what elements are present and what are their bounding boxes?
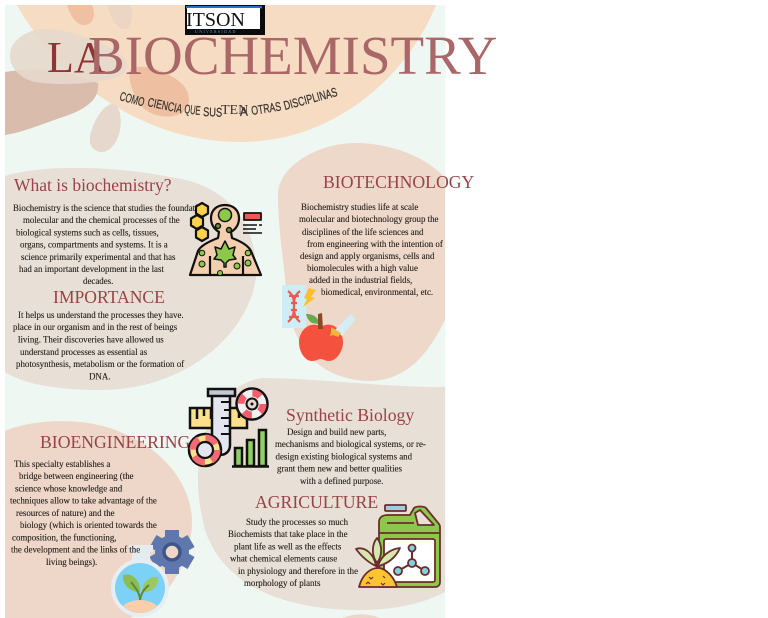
text: agriculture: plant life as well as the effects — [234, 542, 342, 552]
text: biotechnology: biomolecules with a high value — [307, 263, 418, 273]
text: importance — [13, 310, 184, 382]
text: agriculture: what chemical elements cause — [230, 554, 337, 564]
text: bioengineering: techniques allow to take advantage of the — [10, 496, 157, 506]
infographic canvas — [5, 5, 496, 618]
icon: flask with sprout — [111, 545, 169, 617]
text: synthetic biology: design existing biological systems and — [276, 452, 413, 462]
text: biotechnology: design and apply organisms, cells and — [300, 251, 435, 261]
heading: importance: IMPORTANCE — [53, 287, 165, 307]
panel: what is biochemistry and importance — [5, 168, 256, 390]
panel: bioengineering — [5, 421, 192, 618]
logo: ITSON: ITSON — [186, 9, 245, 31]
text: importance: living. Their discoveries have allowed us — [18, 334, 164, 344]
logo: ITSON: UNIVERSIDAD — [195, 29, 237, 34]
text: biotechnology: molecular and biotechnology group the — [299, 214, 439, 224]
text: synthetic biology: mechanisms and biological systems, or re- — [275, 439, 426, 449]
icon: human body with leaf — [190, 203, 262, 276]
subtitle curved: DISCIPLINAS — [282, 85, 339, 113]
subtitle curved: TEN — [221, 103, 248, 118]
text: synthetic biology: with a defined purpose. — [300, 476, 383, 486]
text: importance: It helps us understand the processes they have. — [18, 310, 184, 320]
text: biotechnology: biomedical, environmental, etc. — [321, 287, 433, 297]
panel: synthetic biology and agriculture — [198, 378, 445, 610]
text: biotechnology: Biochemistry studies life at scale — [301, 202, 418, 212]
text: agriculture: Biochemists that take place in the — [228, 529, 348, 539]
text: importance: photosynthesis, metabolism or the formation of — [16, 359, 184, 369]
text: agriculture — [228, 517, 358, 588]
text: biotechnology: disciplines of the life sciences and — [302, 227, 424, 237]
text: bioengineering: composition, the functioning, — [12, 532, 117, 542]
text: what is biochemistry: decades. — [83, 276, 113, 286]
small bottom blob — [342, 614, 380, 618]
panel: biotechnology — [278, 143, 445, 381]
text: bioengineering: living beings). — [46, 557, 97, 567]
text: agriculture: in physiology and therefore in the — [238, 566, 358, 576]
text: biotechnology — [299, 202, 443, 297]
text: what is biochemistry: had an important development in the last — [19, 264, 164, 274]
title: BIOCHEMISTRY: BIOCHEMISTRY — [88, 25, 498, 86]
text: importance: DNA. — [89, 372, 110, 382]
text: synthetic biology: Design and build new parts, — [287, 427, 386, 437]
logo: ITSON — [185, 5, 265, 35]
text: bioengineering — [10, 459, 157, 567]
text: bioengineering: the development and the links of the — [11, 544, 140, 554]
subtitle curved: OTRAS — [250, 99, 282, 118]
text: biotechnology: added in the industrial fields, — [309, 275, 412, 285]
subtitle curved — [118, 85, 339, 120]
text: bioengineering: resources of nature) and the — [16, 508, 115, 518]
text: importance: place in our organism and in the rest of beings — [13, 322, 178, 332]
text: importance: understand processes as essential as — [20, 347, 148, 357]
text: bioengineering: science whose knowledge and — [15, 484, 123, 494]
decorative header blobs — [5, 5, 436, 152]
text: biotechnology: from engineering with the intention of — [307, 239, 443, 249]
icon: chemical jug with plant — [356, 505, 440, 587]
text: what is biochemistry: science primarily experimental and that has — [21, 252, 176, 262]
subtitle curved: QUE — [184, 102, 201, 118]
heading: biotechnology: BIOTECHNOLOGY — [323, 172, 475, 192]
background panel — [5, 5, 446, 618]
text: synthetic biology — [275, 427, 426, 486]
heading: bioengineering: BIOENGINEERING — [40, 432, 191, 452]
text: agriculture: Study the processes so much — [246, 517, 349, 527]
text: what is biochemistry: organs, compartments and systems. It is a — [20, 240, 168, 250]
subtitle curved: SUS — [203, 105, 222, 120]
text: bioengineering: bridge between engineering (the — [19, 471, 134, 481]
icon: dna and apple — [282, 285, 356, 361]
text: what is biochemistry: molecular and the chemical processes of the — [23, 215, 180, 225]
title: LA: LA — [47, 33, 106, 82]
text: what is biochemistry: biological systems such as cells, tissues, — [16, 228, 159, 238]
heading: what is biochemistry: What is biochemistry? — [14, 175, 172, 195]
text: synthetic biology: grant them new and better qualities — [277, 464, 402, 474]
heading: agriculture: AGRICULTURE — [255, 492, 378, 512]
icon: test tube with ruler, wheels and bars — [189, 388, 269, 466]
text: what is biochemistry — [13, 203, 207, 286]
subtitle curved: CIENCIA — [146, 95, 184, 116]
icon: gear — [149, 530, 195, 574]
subtitle curved: COMO — [118, 89, 146, 109]
text: what is biochemistry: Biochemistry is the science that studies the foundation — [13, 203, 207, 213]
text: bioengineering: This specialty establishes a — [14, 459, 110, 469]
text: bioengineering: biology (which is oriented towards the — [20, 520, 157, 530]
text: agriculture: morphology of plants — [244, 578, 321, 588]
heading: synthetic biology: Synthetic Biology — [286, 405, 414, 425]
subtitle curved: A — [239, 105, 249, 119]
